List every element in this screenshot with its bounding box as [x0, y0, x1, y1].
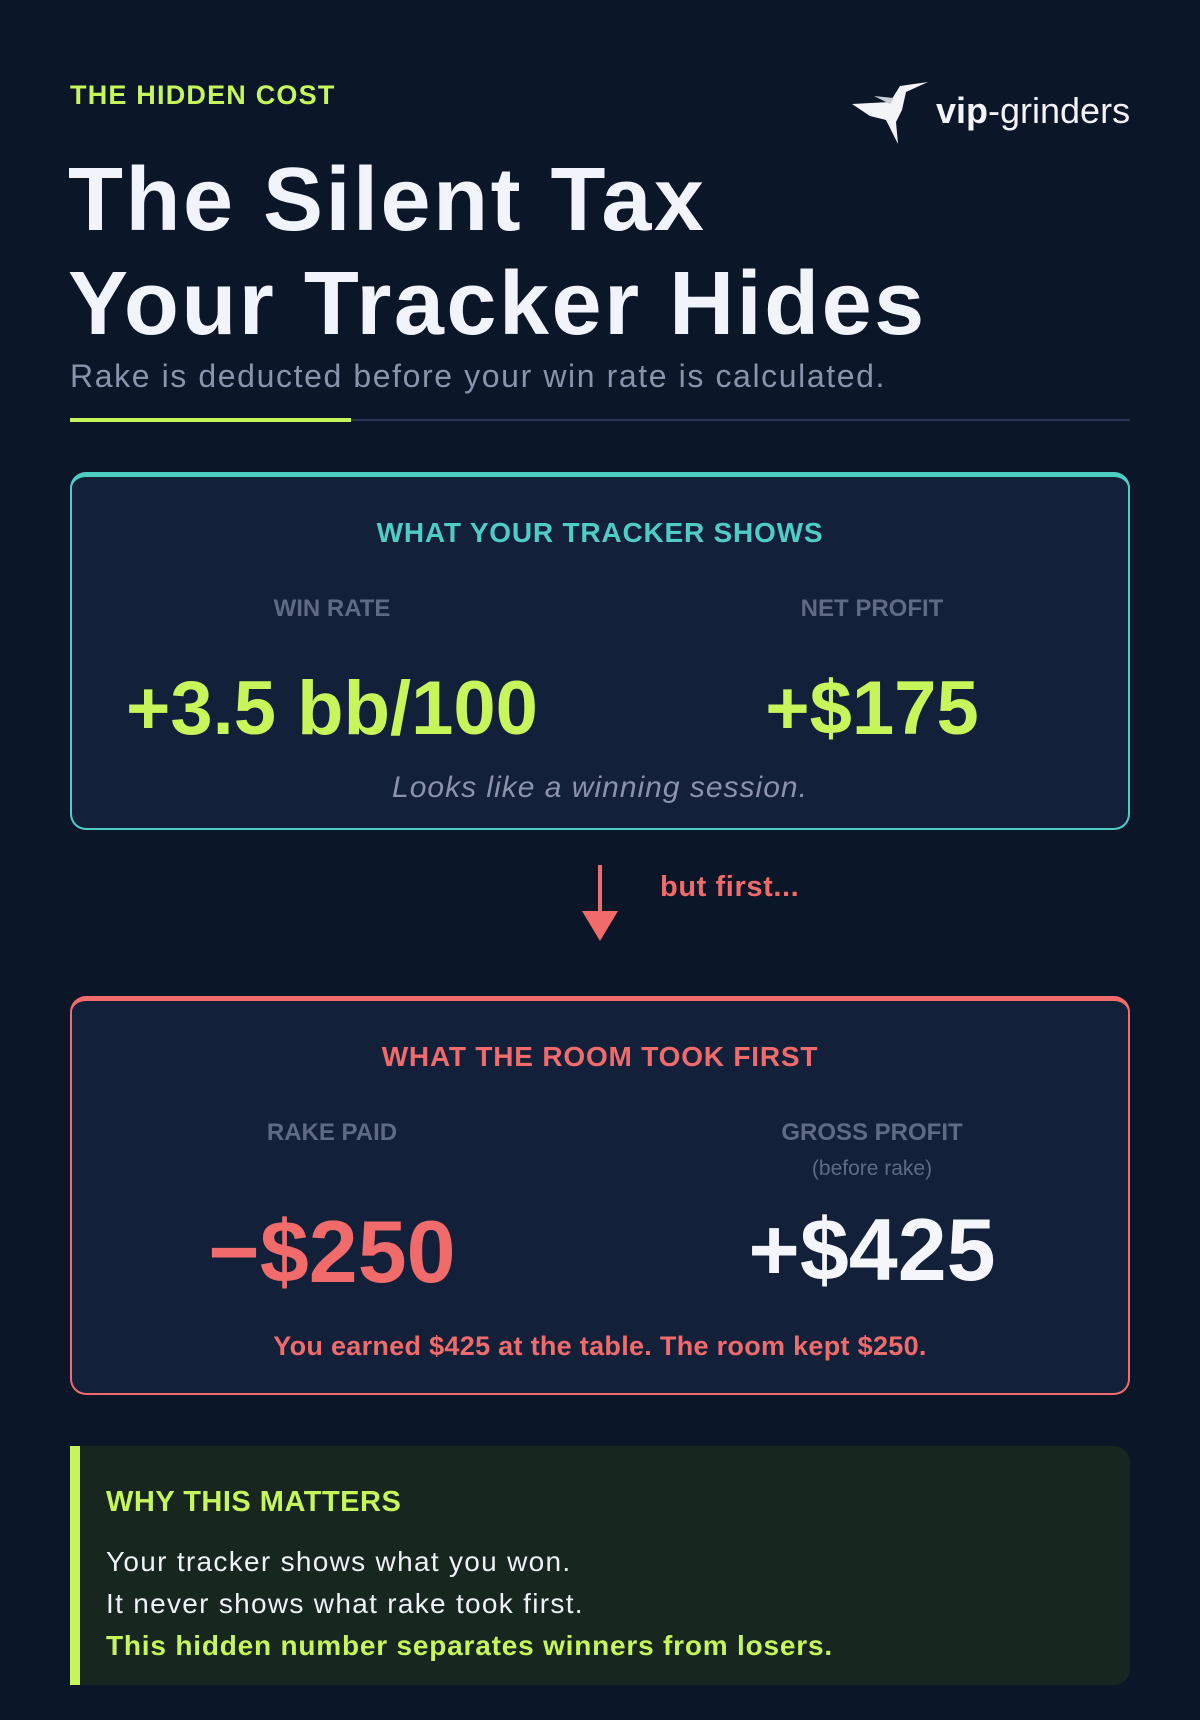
title	[68, 150, 927, 354]
title: The Silent Tax	[68, 150, 706, 250]
stat: win rate: WIN RATE	[274, 595, 390, 622]
stat: win rate	[126, 595, 538, 751]
callout text	[106, 1546, 833, 1661]
stat: net profit: +$175	[765, 666, 979, 751]
caption: You earned $425 at the table. The room kept $250.	[273, 1331, 927, 1361]
panel: tracker shows	[70, 472, 1130, 830]
caption: Looks like a winning session.	[392, 771, 808, 804]
stat: rake paid: RAKE PAID	[267, 1119, 397, 1146]
heading: WHAT YOUR TRACKER SHOWS	[377, 517, 823, 548]
but first label: but first...	[660, 871, 799, 903]
logo text: vip-grinders	[936, 90, 1130, 131]
callout text: This hidden number separates winners from losers.	[106, 1630, 833, 1661]
kicker: THE HIDDEN COST	[70, 80, 336, 110]
logo	[852, 82, 1130, 144]
stat: rake paid: −$250	[208, 1202, 456, 1301]
stat: net profit: NET PROFIT	[801, 595, 943, 622]
panel: room took	[70, 996, 1130, 1395]
callout text: It never shows what rake took first.	[106, 1588, 584, 1619]
stat: gross profit: +$425	[748, 1200, 996, 1299]
subtitle: Rake is deducted before your win rate is calculated.	[70, 358, 886, 394]
title: Your Tracker Hides	[68, 254, 927, 354]
stat: gross profit	[748, 1119, 996, 1299]
callout: why this matters	[70, 1446, 1130, 1685]
stat: win rate: +3.5 bb/100	[126, 666, 538, 751]
heading: WHAT THE ROOM TOOK FIRST	[382, 1041, 818, 1072]
arrow	[582, 865, 618, 941]
stat: net profit	[765, 595, 979, 751]
icon: hummingbird	[852, 82, 928, 144]
stat: rake paid	[208, 1119, 456, 1301]
callout heading: WHY THIS MATTERS	[106, 1486, 401, 1518]
stat: gross profit: (before rake)	[812, 1157, 932, 1180]
stat: gross profit: GROSS PROFIT	[781, 1119, 963, 1146]
callout text: Your tracker shows what you won.	[106, 1546, 571, 1577]
